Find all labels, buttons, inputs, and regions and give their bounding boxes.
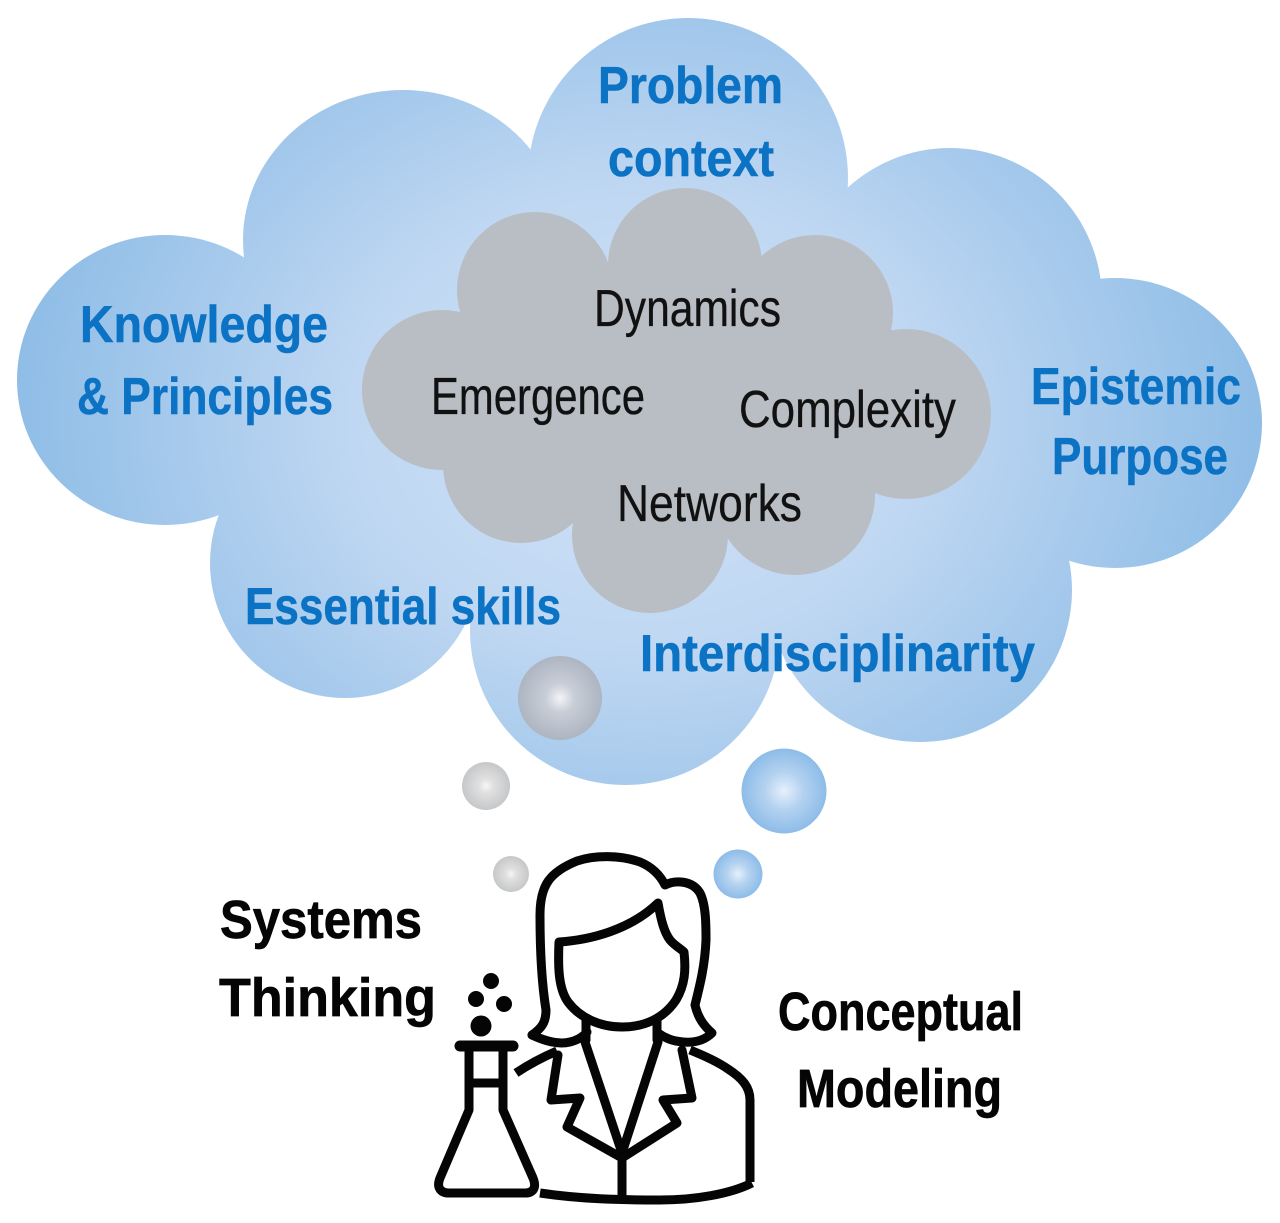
heading: Problem context (598, 57, 783, 188)
blue thought cloud (17, 18, 1262, 785)
label: Conceptual Modeling: Modeling (797, 1059, 1002, 1119)
label: Emergence: Emergence (431, 368, 645, 426)
heading: Essential skills: Essential skills (245, 578, 561, 636)
heading: Epistemic Purpose: Purpose (1052, 428, 1228, 486)
label: Systems Thinking (219, 890, 436, 1028)
icon: scientist (516, 857, 752, 1200)
heading: Problem context: Problem (598, 57, 783, 115)
heading: Problem context: context (608, 130, 774, 188)
heading: Knowledge & Principles: Knowledge (80, 296, 328, 354)
label: Conceptual Modeling (778, 982, 1023, 1119)
label: Networks: Networks (617, 475, 802, 533)
grey inner cloud (362, 188, 991, 613)
heading: Knowledge & Principles (77, 296, 333, 426)
heading: Knowledge & Principles: & Principles (77, 368, 333, 426)
thought bubbles (462, 656, 826, 898)
label: Conceptual Modeling: Conceptual (778, 982, 1023, 1042)
heading: Epistemic Purpose (1031, 358, 1241, 486)
label: Systems Thinking: Thinking (219, 968, 436, 1028)
heading: Interdisciplinarity: Interdisciplinarity (640, 625, 1035, 683)
icon: flask with bubbles (439, 973, 535, 1193)
label: Complexity: Complexity (739, 381, 956, 439)
label: Systems Thinking: Systems (220, 890, 422, 950)
heading: Epistemic Purpose: Epistemic (1031, 358, 1241, 416)
label: Dynamics: Dynamics (594, 280, 781, 338)
